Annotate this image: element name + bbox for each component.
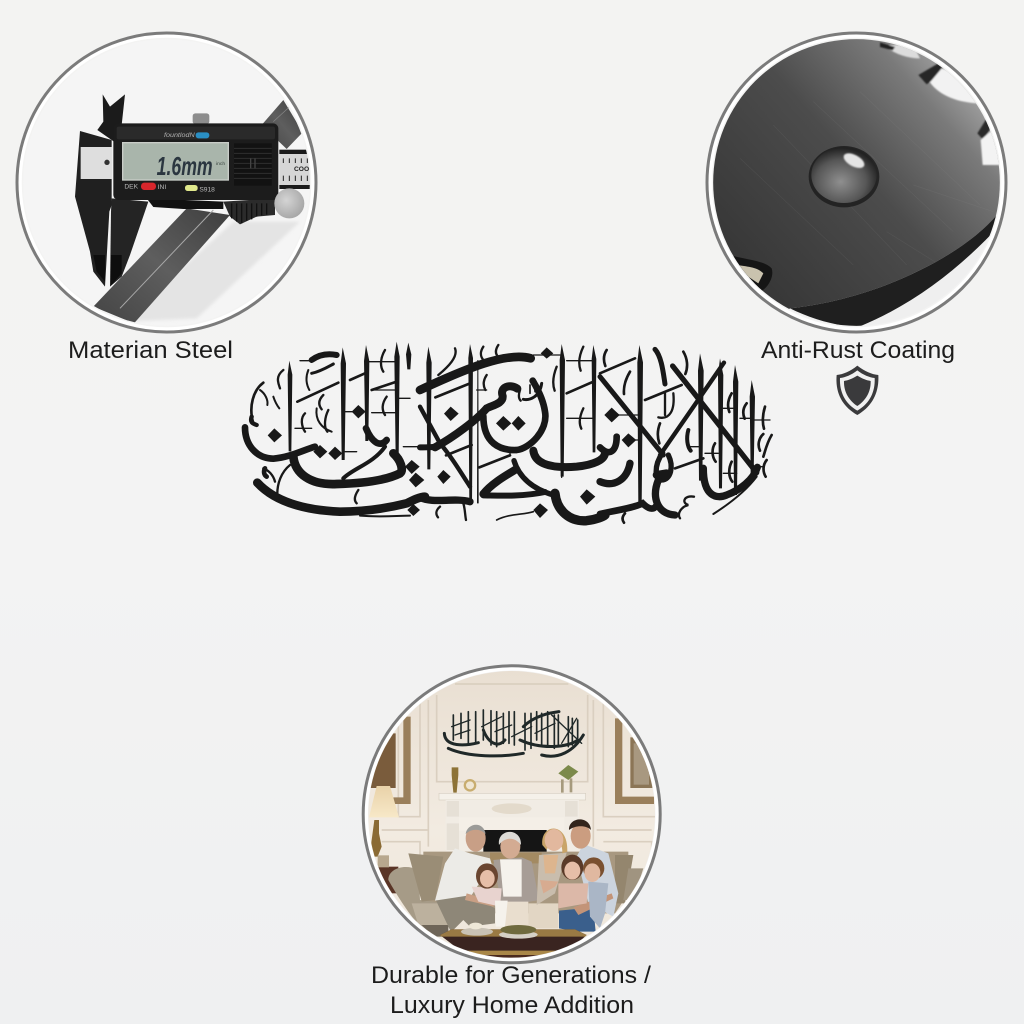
artwork: black metal calligraphy wall panel: [245, 342, 772, 523]
person: blonde mother: [528, 829, 567, 928]
room detail: coffee table with trays: [440, 923, 587, 960]
photo: family seated in living room under wall art: [365, 670, 658, 960]
room detail: sofa: [388, 852, 643, 937]
frame: ring of family photo: [363, 666, 660, 963]
panel: durable luxury home addition: [363, 666, 660, 1019]
artwork section: centre third of calligraphy: [420, 344, 605, 521]
person: grandfather: [435, 825, 495, 930]
room detail: fireplace: [439, 793, 586, 857]
photo: digital caliper measuring steel bar: [75, 94, 310, 322]
person: child left: [472, 863, 508, 927]
person: child right: [583, 857, 608, 928]
photo: digital caliper measuring steel bar: COO: [294, 166, 309, 173]
artwork section: left third of calligraphy: [245, 342, 425, 516]
photo: water droplet on black brushed metal: [713, 39, 1000, 326]
photo: digital caliper measuring steel bar: S918: [199, 187, 215, 194]
frame: ring of coating photo: [707, 33, 1006, 332]
person: child centre: [558, 855, 588, 908]
photo: digital caliper measuring steel bar: INI: [158, 184, 166, 191]
room detail: lamp: [369, 786, 399, 893]
room detail: gold framed paintings: [368, 717, 654, 804]
label: anti-rust coating: Anti-Rust Coating: [761, 337, 955, 364]
icon: shield: [836, 366, 878, 415]
label: durable for generations: Durable for Generations /: [371, 962, 651, 989]
frame: ring of steel photo: [17, 33, 316, 332]
person: father: [559, 819, 618, 932]
person: grandmother: [493, 832, 539, 927]
label: material steel: Materian Steel: [68, 337, 233, 364]
panel: anti-rust coating: [700, 25, 1013, 415]
photo: digital caliper measuring steel bar: fountlodN: [164, 132, 195, 139]
photo: digital caliper measuring steel bar: 1.6mm: [157, 151, 213, 181]
photo: digital caliper measuring steel bar: inch: [216, 161, 225, 167]
room detail: mantel ornaments: [452, 765, 578, 793]
label: luxury home addition: Luxury Home Addition: [390, 992, 634, 1019]
panel: material steel: [17, 33, 316, 364]
artwork section: right third of calligraphy: [600, 345, 772, 523]
photo: digital caliper measuring steel bar: DEK: [124, 183, 139, 190]
room detail: miniature calligraphy artwork: [444, 710, 583, 756]
